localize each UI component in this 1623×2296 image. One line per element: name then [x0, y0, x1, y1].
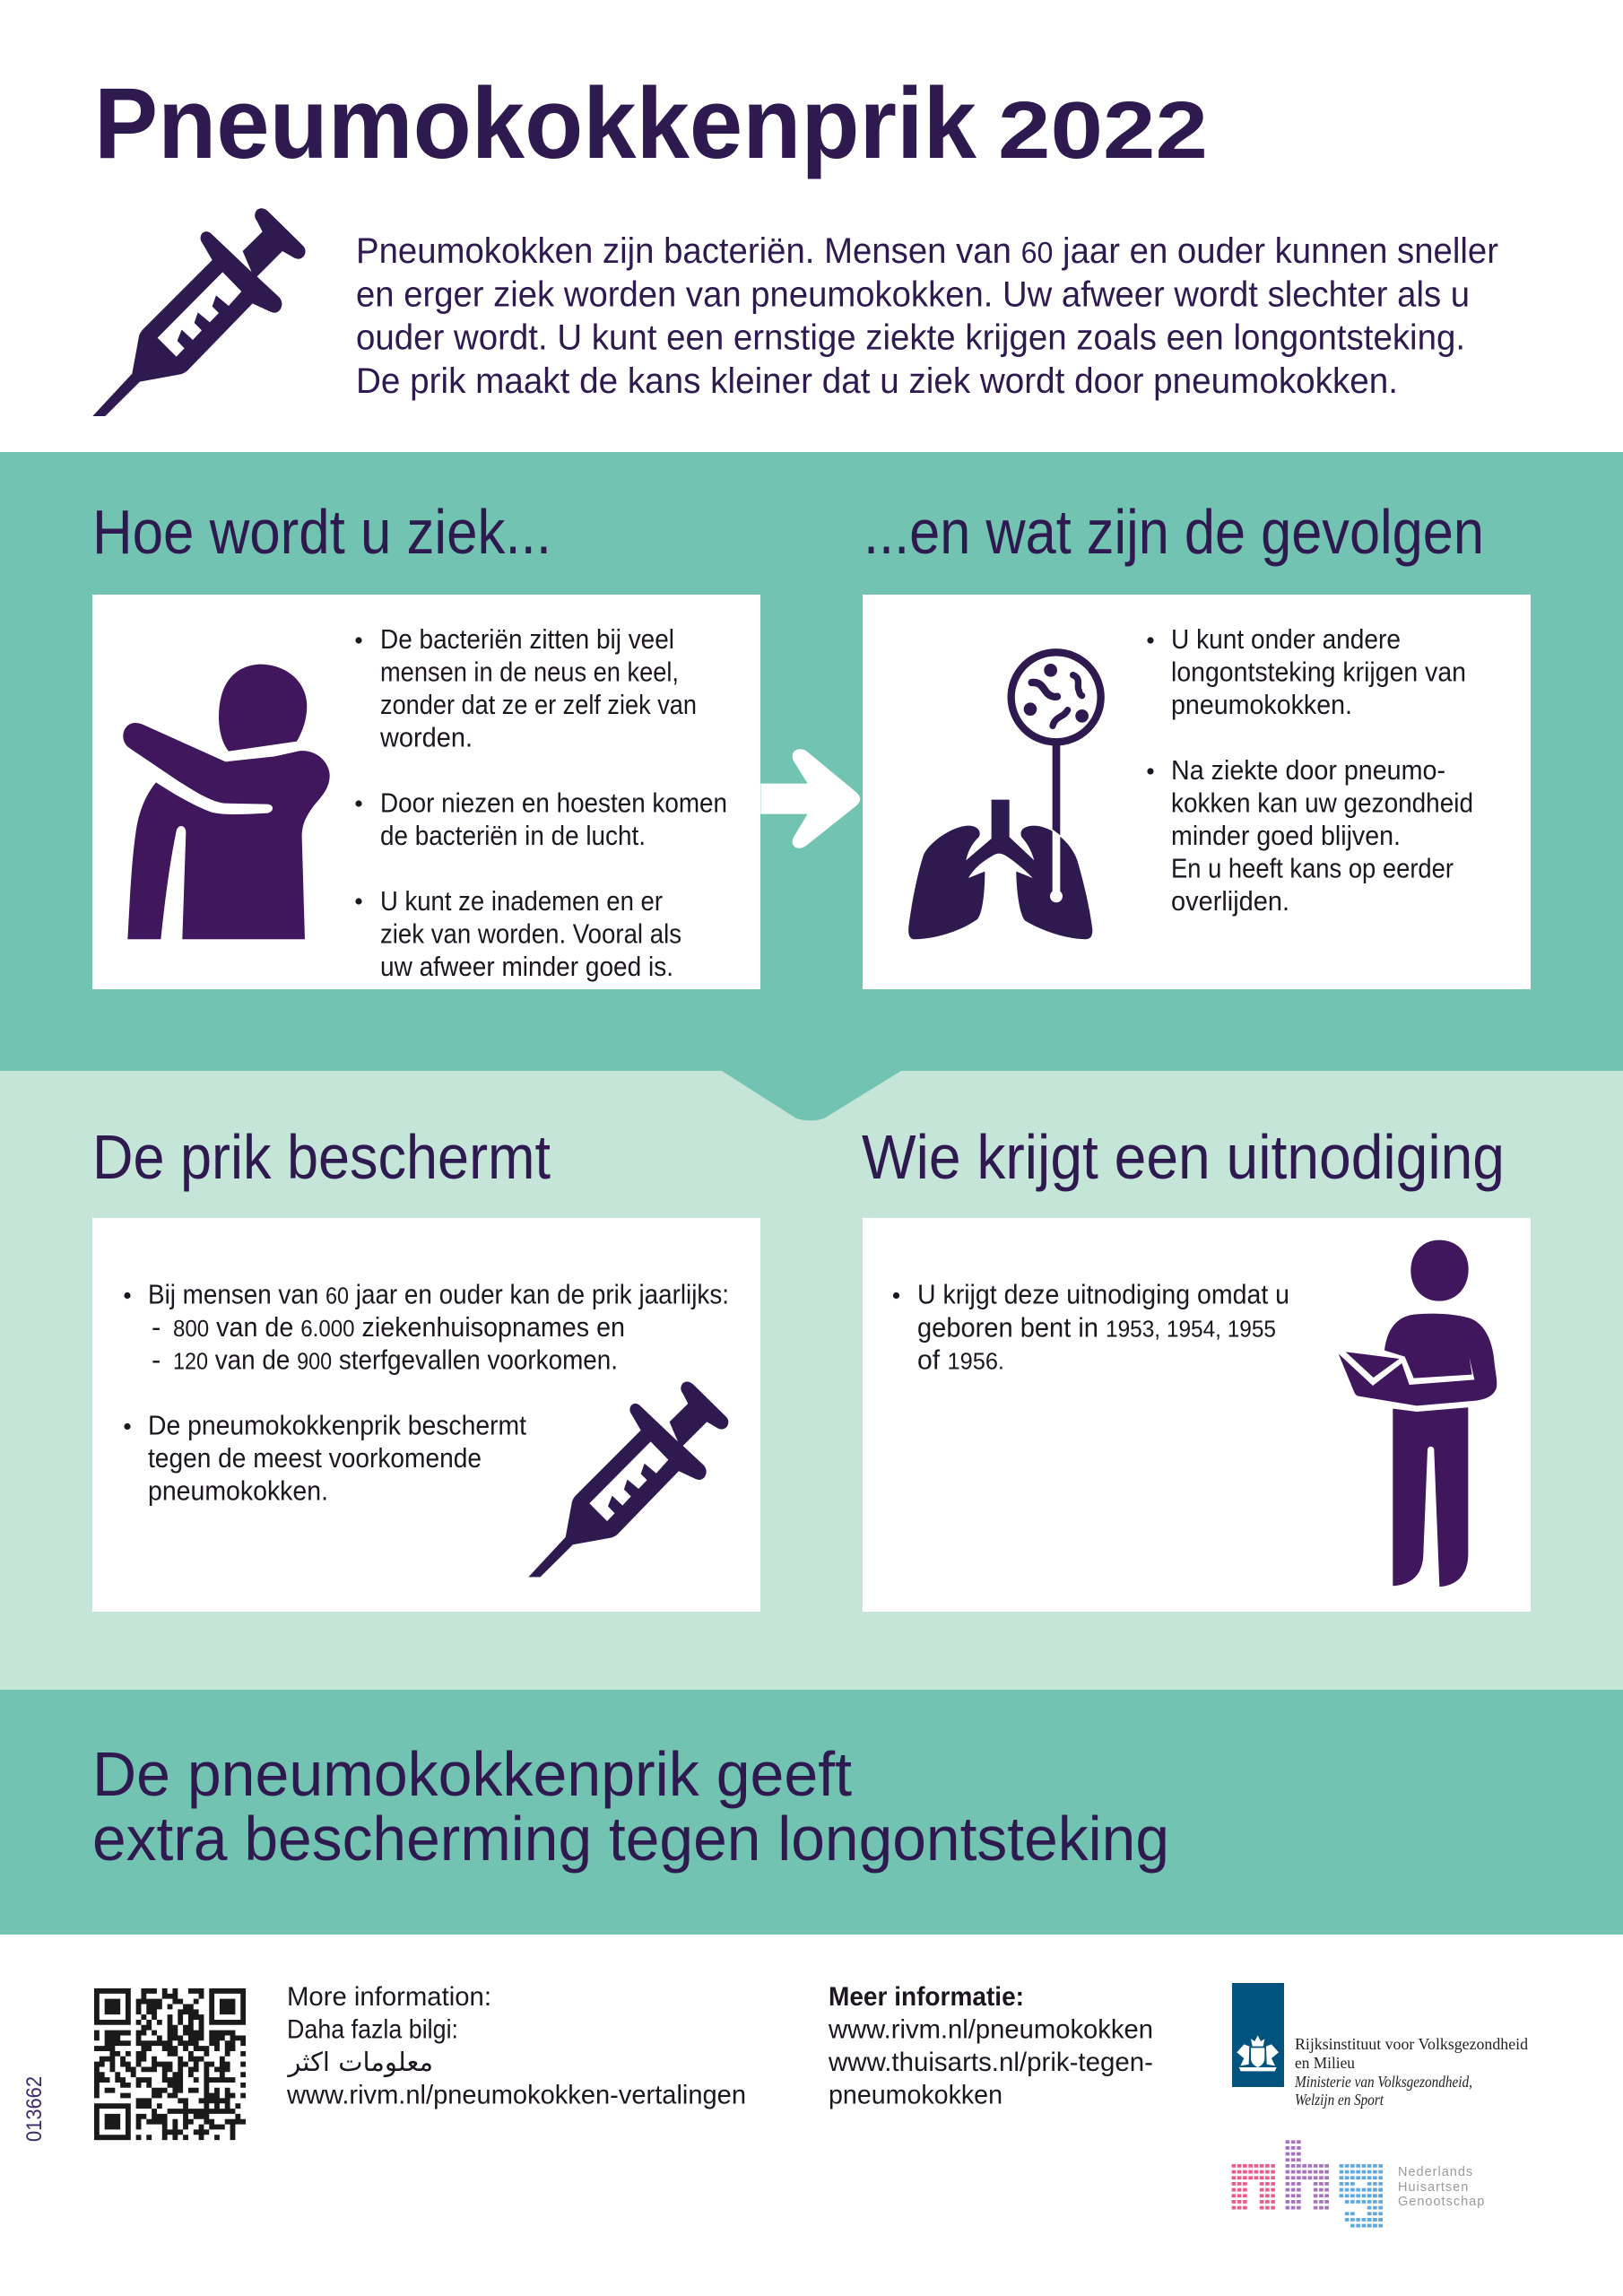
panel: de prik beschermt [92, 1218, 760, 1612]
body text: zonder dat ze er zelf ziek van [380, 689, 697, 720]
letter n [1231, 2163, 1276, 2211]
conclusion text: De pneumokokkenprik geeft [92, 1739, 852, 1809]
letter h [1285, 2139, 1330, 2211]
logo: RIVM [1232, 1983, 1528, 2109]
title: Pneumokokkenprik [94, 67, 977, 179]
body text: worden. [379, 721, 473, 753]
body text: of 1956. [917, 1344, 1004, 1376]
body text [379, 623, 727, 982]
icon: coughing person [123, 665, 330, 939]
body text: tegen de meest voorkomende [148, 1442, 482, 1474]
panel: wie krijgt een uitnodiging [863, 1218, 1531, 1612]
panel: hoe wordt u ziek [92, 595, 760, 989]
intro text: en erger ziek worden van pneumokokken. Uw afweer wordt slechter als u [356, 274, 1470, 314]
body text: pneumokokken. [1171, 689, 1352, 720]
body text: De pneumokokkenprik beschermt [148, 1410, 526, 1440]
conclusion text: extra bescherming tegen longontsteking [92, 1804, 1169, 1874]
translations info: More information: [287, 1982, 491, 2012]
more info: Meer informatie: [829, 1982, 1024, 2012]
body text: De bacteriën zitten bij veel [380, 623, 674, 655]
QR code [94, 1991, 246, 2137]
body text: de bacteriën in de lucht. [380, 820, 646, 851]
more info: www.thuisarts.nl/prik-tegen- [828, 2048, 1153, 2077]
translations info: Daha fazla bilgi: [287, 2014, 458, 2045]
body text: Bij mensen van 60 jaar en ouder kan de prik jaarlijks: [148, 1279, 729, 1309]
title: 2022 [998, 86, 1208, 176]
body text: - [152, 1311, 161, 1343]
organisation name: Rijksinstituut voor Volksgezondheid [1295, 2035, 1528, 2053]
icon: lungs with magnified bacteria [908, 652, 1101, 939]
icon: syringe [92, 208, 306, 416]
body text: geboren bent in 1953, 1954, 1955 [917, 1311, 1276, 1344]
body text: pneumokokken. [148, 1474, 328, 1507]
bullets [124, 1292, 131, 1430]
bullets [1147, 637, 1154, 775]
organisation name: Welzijn en Sport [1295, 2091, 1384, 2109]
body text [1171, 623, 1473, 917]
body text: mensen in de neus en keel, [380, 657, 679, 687]
body text: kokken kan uw gezondheid [1171, 787, 1473, 818]
body text: En u heeft kans op eerder [1171, 852, 1454, 884]
body text: uw afweer minder goed is. [380, 951, 673, 982]
icon: syringe small [528, 1381, 728, 1577]
NHG name: Nederlands [1398, 2165, 1473, 2179]
body text: 800 van de 6.000 ziekenhuisopnames en [173, 1311, 625, 1343]
translations info: www.rivm.nl/pneumokokken-vertalingen [286, 2081, 746, 2109]
translations info [286, 1982, 746, 2109]
NHG name: Huisartsen [1398, 2180, 1469, 2195]
heading: de prik beschermt: De prik beschermt [92, 1122, 551, 1192]
bullets [355, 637, 362, 905]
crest [1237, 2035, 1279, 2071]
body text: U kunt ze inademen en er [380, 885, 663, 917]
panel: light band [0, 1071, 1623, 1690]
body text: minder goed blijven. [1171, 820, 1401, 851]
organisation name: Ministerie van Volksgezondheid, [1294, 2073, 1472, 2091]
logo: NHG [1231, 2139, 1485, 2229]
panel: conclusion band [0, 1690, 1623, 1935]
organisation name [1294, 2035, 1528, 2109]
letter g [1339, 2163, 1384, 2229]
arrow [760, 749, 860, 848]
more info: pneumokokken [829, 2081, 1002, 2109]
heading: wie krijgt een uitnodiging: Wie krijgt een uitnodiging [862, 1122, 1505, 1192]
body text: U kunt onder andere [1171, 623, 1401, 655]
bullet [893, 1292, 899, 1299]
organisation name: en Milieu [1295, 2054, 1355, 2072]
panel: gevolgen [863, 595, 1531, 989]
body text: U krijgt deze uitnodiging omdat u [917, 1279, 1289, 1309]
document code: 013662 [22, 2076, 47, 2142]
intro text: Pneumokokken zijn bacteriën. Mensen van 60 jaar en ouder kunnen sneller [356, 231, 1498, 271]
conclusion text [92, 1739, 1169, 1874]
body text: - [152, 1344, 161, 1376]
intro text: ouder wordt. U kunt een ernstige ziekte krijgen zoals een longontsteking. [356, 317, 1465, 357]
body text: overlijden. [1171, 885, 1289, 917]
body text: Na ziekte door pneumo- [1171, 754, 1445, 786]
body text: longontsteking krijgen van [1171, 657, 1466, 687]
body text: 120 van de 900 sterfgevallen voorkomen. [173, 1344, 618, 1376]
translations info: معلومات اكثر [286, 2047, 433, 2077]
body text [148, 1279, 729, 1507]
body text: Door niezen en hoesten komen [380, 787, 727, 818]
pointer: teal chevron [722, 1071, 901, 1121]
NHG name [1398, 2165, 1485, 2209]
intro text [356, 231, 1498, 401]
heading: hoe wordt u ziek: Hoe wordt u ziek... [92, 497, 551, 567]
more info [828, 1982, 1153, 2109]
intro text: De prik maakt de kans kleiner dat u ziek wordt door pneumokokken. [356, 361, 1398, 401]
body text [917, 1279, 1289, 1376]
body text: ziek van worden. Vooral als [380, 918, 681, 949]
panel: teal band [0, 452, 1623, 1071]
more info: www.rivm.nl/pneumokokken [828, 2014, 1153, 2045]
NHG name: Genootschap [1398, 2195, 1485, 2209]
heading: gevolgen: ...en wat zijn de gevolgen [864, 497, 1484, 567]
icon: person reading letter [1339, 1240, 1497, 1587]
